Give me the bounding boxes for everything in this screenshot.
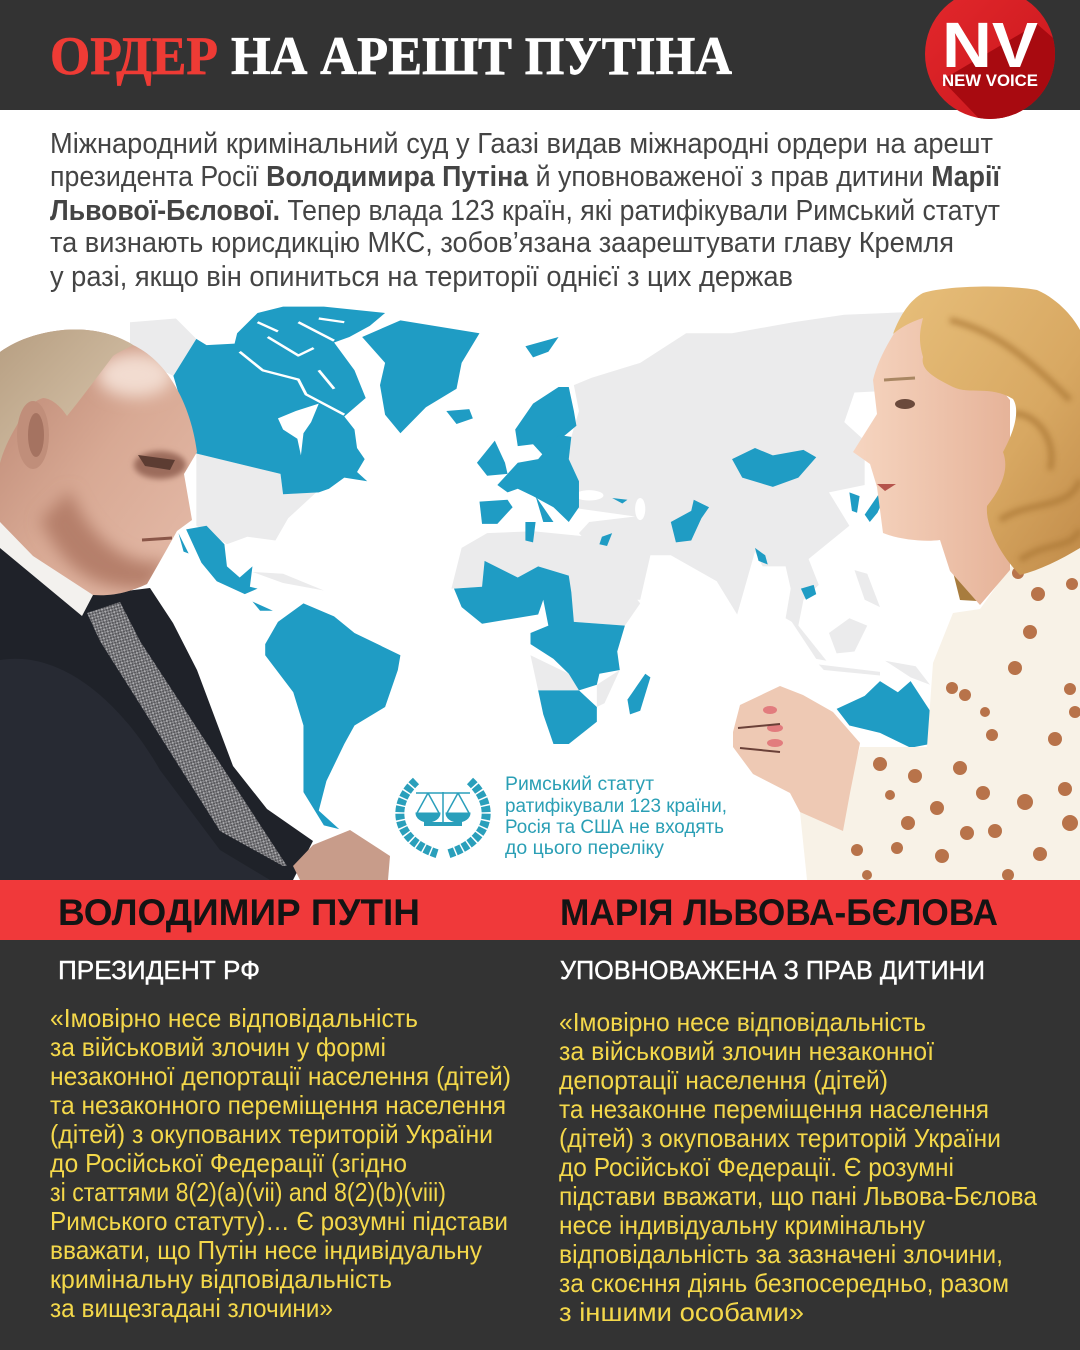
title: ОРДЕР — [50, 26, 218, 86]
quote: Lvova-Belova: (дітей) з окупованих територій України — [559, 1123, 1001, 1153]
quote: Putin: та незаконного переміщення населення — [50, 1090, 506, 1120]
logo: NV New Voice — [925, 0, 1055, 119]
role: Lvova-Belova: УПОВНОВАЖЕНА З ПРАВ ДИТИНИ — [560, 955, 985, 985]
quote: Putin — [50, 1003, 511, 1323]
quote: Lvova-Belova: «Імовірно несе відповідальність — [559, 1007, 926, 1037]
intro text: Львової-Бєлової. Тепер влада 123 країн, які ратифікували Римський статут — [50, 195, 1000, 227]
eye — [138, 455, 175, 470]
intro text — [50, 128, 1001, 293]
logo: NV New Voice: NEW VOICE — [942, 71, 1038, 90]
tie — [87, 602, 287, 866]
shirt collar — [0, 522, 93, 616]
map caption: Римський статут — [505, 774, 654, 795]
face and neck — [853, 295, 1010, 605]
quote: Putin: вважати, що Путін несе індивідуальну — [50, 1235, 482, 1265]
hands — [293, 830, 390, 880]
quote: Putin: кримінальну відповідальність — [50, 1264, 392, 1294]
quote: Putin: (дітей) з окупованих територій України — [50, 1119, 493, 1149]
intro text: президента Росії Володимира Путіна й уповноваженої з прав дитини Марії — [50, 161, 1001, 193]
map: seas cut out — [575, 490, 645, 520]
logo: NV New Voice: NV — [942, 9, 1038, 81]
quote: Putin: до Російської Федерації (згідно — [50, 1148, 407, 1178]
quote: Lvova-Belova — [559, 1007, 1038, 1327]
quote: Lvova-Belova: з іншими особами» — [559, 1297, 804, 1327]
intro text: Міжнародний кримінальний суд у Гаазі видав міжнародні ордери на арешт — [50, 128, 993, 160]
hands — [733, 686, 860, 831]
map caption: Росія та США не входять — [505, 817, 724, 838]
intro text: у разі, якщо він опиниться на території однієї з цих держав — [50, 261, 793, 293]
map caption: ратифікували 123 країни, — [505, 796, 727, 817]
neck hair — [947, 548, 985, 601]
text panel background — [0, 940, 1080, 1350]
name: Lvova-Belova: МАРІЯ ЛЬВОВА-БЄЛОВА — [560, 892, 998, 933]
suit — [0, 525, 313, 880]
map: member countries — [173, 307, 930, 829]
head — [0, 329, 197, 595]
quote: Lvova-Belova: та незаконне переміщення населення — [559, 1094, 989, 1124]
ear — [17, 401, 49, 469]
map: Hudson Bay and arctic channels — [240, 318, 344, 455]
quote: Putin: Римського статуту)… Є розумні підстави — [50, 1206, 508, 1236]
map: non-member land — [130, 311, 930, 707]
quote: Putin: «Імовірно несе відповідальність — [50, 1003, 418, 1033]
quote: Lvova-Belova: депортації населення (дітей) — [559, 1065, 888, 1095]
quote: Putin: за вищезгадані злочини» — [50, 1293, 333, 1323]
lips — [877, 484, 896, 491]
blouse — [800, 548, 1080, 880]
name: Putin: ВОЛОДИМИР ПУТІН — [58, 892, 420, 933]
mouth — [142, 538, 172, 540]
icon: ICC scales and wreath — [400, 781, 486, 854]
intro text: та визнають юрисдикцію МКС, зобов’язана заарештувати главу Кремля — [50, 227, 954, 259]
blouse dots — [851, 567, 1080, 881]
name band — [0, 880, 1080, 940]
brow and eye — [884, 378, 915, 380]
map caption: до цього переліку — [505, 838, 664, 859]
quote: Lvova-Belova: за скоєння діянь безпосередньо, разом — [559, 1268, 1009, 1298]
quote: Putin: за військовий злочин у формі — [50, 1032, 386, 1062]
world map — [130, 307, 930, 829]
header bar — [0, 0, 1080, 110]
hair — [0, 330, 133, 462]
role: Putin: ПРЕЗИДЕНТ РФ — [58, 955, 260, 985]
photo: Lvova-Belova — [733, 280, 1080, 881]
title: НА АРЕШТ ПУТІНА — [231, 26, 732, 86]
quote: Lvova-Belova: до Російської Федерації. Є розумні — [559, 1152, 954, 1182]
photo: Putin — [0, 320, 390, 880]
quote: Putin: зі статтями 8(2)(a)(vii) and 8(2)(b)(viii) — [50, 1177, 446, 1207]
hair — [885, 280, 1080, 580]
quote: Putin: незаконної депортації населення (дітей) — [50, 1061, 511, 1091]
map caption — [505, 774, 727, 859]
quote: Lvova-Belova: за військовий злочин незаконної — [559, 1036, 934, 1066]
quote: Lvova-Belova: відповідальність за зазначені злочини, — [559, 1239, 1003, 1269]
quote: Lvova-Belova: підстави вважати, що пані Львова-Бєлова — [559, 1181, 1038, 1211]
quote: Lvova-Belova: несе індивідуальну кримінальну — [559, 1210, 925, 1240]
